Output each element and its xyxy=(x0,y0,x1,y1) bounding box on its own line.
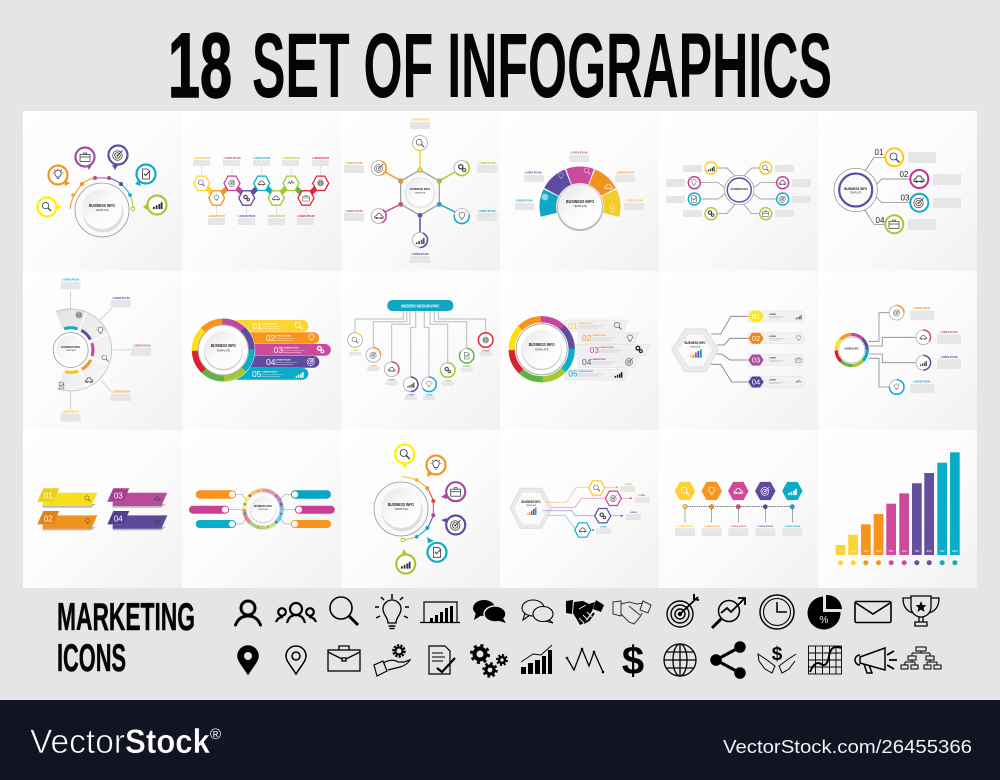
panel 16: hexagon hub with four lines: LOREM xyxy=(638,495,646,497)
panel 14: dotted ring with six pill bars: TEMPLATE xyxy=(258,508,269,511)
panel 12: ring with four connected nodes: LOREM IPSUM xyxy=(913,307,930,310)
panel 16: hexagon hub with four lines: LOREM xyxy=(630,512,637,514)
icon: growth bars xyxy=(521,645,552,674)
icon: trophy xyxy=(903,596,939,626)
icon row 2 xyxy=(238,639,941,683)
panel 8: colour ring with five numbered ribbons: LOREM IPSUM xyxy=(275,336,291,338)
panel 10: colour ring with five grey tabs: 03 xyxy=(590,345,599,355)
panel 6: ring with numbered options: 01 xyxy=(875,148,884,157)
panel 8: colour ring with five numbered ribbons: LOREM IPSUM xyxy=(262,324,277,326)
panel 10: colour ring with five grey tabs: 04 xyxy=(582,357,592,367)
panel 13: four parallelogram banners: 03 xyxy=(114,492,123,501)
panel 2: hexagon chain xyxy=(193,157,329,225)
panel 2: hexagon chain: LOREM IPSUM xyxy=(208,215,225,218)
panel 6: ring with numbered options: 03 xyxy=(901,194,910,202)
panel 18: percentage bar chart: 60% xyxy=(902,551,907,553)
panel 8: colour ring with five numbered ribbons: LOREM IPSUM xyxy=(262,372,277,374)
panel 2: hexagon chain: LOREM IPSUM xyxy=(298,215,314,218)
panel 2: hexagon chain: LOREM IPSUM xyxy=(283,157,299,160)
panel 7: half-ring fan with dashed callouts: LOREM IPSUM xyxy=(62,410,79,414)
icon: growth magnifier xyxy=(712,598,745,628)
panel 10: colour ring with five grey tabs: LOREM IPSUM xyxy=(599,347,614,349)
icon: outline speech bubbles xyxy=(522,600,553,623)
panel 4: segmented semi-donut xyxy=(515,152,644,231)
panel 7: half-ring fan with dashed callouts: LOREM IPSUM xyxy=(113,390,129,394)
panel 6: ring with numbered options: BUSINESS INFO xyxy=(844,186,867,191)
panel 4: segmented semi-donut: LOREM IPSUM xyxy=(516,200,532,202)
panel 16: hexagon hub with four lines: TEMPLATE xyxy=(526,504,537,507)
icon: gears xyxy=(472,646,507,676)
panel 18: percentage bar chart xyxy=(836,452,960,565)
panel 17: five-hexagon timeline: LOREM IPSUM xyxy=(758,526,773,528)
panel 18: percentage bar chart: 90% xyxy=(940,551,945,553)
panel 10: colour ring with five grey tabs: LOREM IPSUM xyxy=(578,371,593,373)
panel 18: percentage bar chart: 100% xyxy=(952,551,958,553)
panel 11: hexagon hub with four hex-numbered rows: 02 xyxy=(752,334,760,343)
panel 17: five-hexagon timeline: LOREM IPSUM xyxy=(731,526,746,528)
panel 6: ring with numbered options xyxy=(834,148,961,233)
panel 7: half-ring fan with dashed callouts: LOREM IPSUM xyxy=(113,297,129,300)
icon: laptop chart xyxy=(420,602,460,622)
icon: people xyxy=(276,603,316,623)
panel 16: hexagon hub with four lines: LOREM xyxy=(600,526,607,528)
panel 16: hexagon hub with four lines: LOREM xyxy=(625,484,632,486)
panel 9: modern infographic org tree: LOREM xyxy=(388,380,396,382)
panel 3: hexagon with six spokes: LOREM IPSUM xyxy=(479,210,495,213)
panel 16: hexagon hub with four lines xyxy=(510,481,649,537)
panel 17: five-hexagon timeline xyxy=(675,482,803,536)
panel 8: colour ring with five numbered ribbons: 03 xyxy=(274,345,283,355)
panel 9: modern infographic org tree: LOREM xyxy=(351,350,359,352)
panel 3: hexagon with six spokes: BUSINESS INFO xyxy=(410,187,431,191)
heading: marketing icons: MARKETING xyxy=(57,596,195,639)
logo: VectorStock: ® xyxy=(210,726,221,743)
panel 18: percentage bar chart: 50% xyxy=(889,551,894,553)
panel 1: arc of speech bubbles xyxy=(38,146,166,237)
panel 12: ring with four connected nodes: LOREM IPSUM xyxy=(913,381,930,384)
panel 10: colour ring with five grey tabs xyxy=(499,307,650,392)
panel 11: hexagon hub with four hex-numbered rows: LOREM xyxy=(769,336,776,338)
icon: org chart xyxy=(901,647,941,669)
panel 18: percentage bar chart: 20% xyxy=(851,551,856,553)
panel 11: hexagon hub with four hex-numbered rows: BUSINESS INFO xyxy=(684,341,706,345)
icon: person xyxy=(236,601,260,625)
panel 7: half-ring fan with dashed callouts: LOREM IPSUM xyxy=(62,278,79,282)
panel 1: arc of speech bubbles: TEMPLATE xyxy=(96,208,109,212)
panel 3: hexagon with six spokes xyxy=(344,118,497,263)
logo: VectorStock xyxy=(30,723,221,761)
panel 10: colour ring with five grey tabs: 05 xyxy=(568,368,578,378)
panel 6: ring with numbered options: TEMPLATE xyxy=(850,192,862,194)
icon: megaphone xyxy=(855,648,897,673)
panel 8: colour ring with five numbered ribbons: 01 xyxy=(252,321,262,331)
icon: envelope xyxy=(855,602,891,622)
panel 11: hexagon hub with four hex-numbered rows: 01 xyxy=(752,312,760,321)
title: 18 xyxy=(168,15,232,117)
panel grid backgrounds xyxy=(23,111,977,588)
panel 8: colour ring with five numbered ribbons: LOREM IPSUM xyxy=(283,348,299,350)
panel 14: dotted ring with six pill bars xyxy=(189,483,335,535)
panel 2: hexagon chain: LOREM IPSUM xyxy=(238,215,255,218)
panel 8: colour ring with five numbered ribbons: TEMPLATE xyxy=(217,348,230,352)
panel 11: hexagon hub with four hex-numbered rows: LOREM xyxy=(769,314,776,316)
panel 9: modern infographic org tree: LOREM xyxy=(425,394,433,396)
icon: share xyxy=(711,642,745,678)
panel 8: colour ring with five numbered ribbons: 05 xyxy=(252,369,262,379)
panel 11: hexagon hub with four hex-numbered rows: 03 xyxy=(752,356,760,365)
panel 12: ring with four connected nodes: LOREM IPSUM xyxy=(941,356,957,359)
panel 8: colour ring with five numbered ribbons: LOREM IPSUM xyxy=(275,360,291,362)
panel 10: colour ring with five grey tabs: TEMPLATE xyxy=(535,348,549,352)
icon: solid handshake xyxy=(566,600,604,625)
panel 13: four parallelogram banners xyxy=(37,488,167,530)
panel 10: colour ring with five grey tabs: LOREM IPSUM xyxy=(591,359,606,361)
panel 13: four parallelogram banners: 04 xyxy=(114,514,123,523)
panel 11: hexagon hub with four hex-numbered rows: TEMPLATE xyxy=(690,346,701,348)
icon: percent pie: % xyxy=(820,615,829,626)
panel 10: colour ring with five grey tabs: 02 xyxy=(582,333,592,343)
icon: zig-zag line xyxy=(566,648,604,673)
panel 15: big disc with speech-bubble arc xyxy=(374,444,465,574)
icon: clock xyxy=(760,595,794,629)
panel 1: arc of speech bubbles: BUSINESS INFO xyxy=(89,203,116,208)
footer image reference: VectorStock.com/26455366 xyxy=(723,736,972,757)
heading: marketing icons xyxy=(57,596,195,680)
panel 18: percentage bar chart: 80% xyxy=(927,551,932,553)
icon: document check xyxy=(429,646,455,674)
icon: dollar sign: $ xyxy=(622,639,644,683)
icon: solid pin xyxy=(238,646,258,674)
panel 5: central ring with eight branches xyxy=(666,162,811,220)
panel 10: colour ring with five grey tabs: BUSINESS INFO xyxy=(529,342,555,347)
icon: hands with dollar: $ xyxy=(772,644,783,665)
panel 13: four parallelogram banners: 01 xyxy=(44,492,53,501)
panel 18: percentage bar chart: 30% xyxy=(864,551,868,553)
panel 3: hexagon with six spokes: LOREM IPSUM xyxy=(412,118,428,122)
icon: briefcase xyxy=(328,646,360,671)
panel 7: half-ring fan with dashed callouts xyxy=(53,278,151,422)
panel 11: hexagon hub with four hex-numbered rows: LOREM xyxy=(769,358,776,360)
panel 10: colour ring with five grey tabs: LOREM IPSUM xyxy=(591,335,606,337)
panel 15: big disc with speech-bubble arc: BUSINESS INFO xyxy=(388,502,415,507)
panel 2: hexagon chain: LOREM IPSUM xyxy=(224,157,240,160)
panel 3: hexagon with six spokes: LOREM IPSUM xyxy=(479,162,495,165)
panel 16: hexagon hub with four lines: BUSINESS INFO xyxy=(522,500,541,504)
icon: solid speech bubbles xyxy=(473,600,506,623)
panel 11: hexagon hub with four hex-numbered rows: LOREM xyxy=(769,380,776,382)
logo: VectorStock: Stock xyxy=(125,723,210,761)
panel 9: modern infographic org tree xyxy=(348,300,493,400)
panel 9: modern infographic org tree: LOREM xyxy=(444,380,452,382)
icon: target with arrow xyxy=(667,594,699,627)
panel 10: colour ring with five grey tabs: 01 xyxy=(568,321,578,331)
heading: marketing icons: ICONS xyxy=(57,637,126,680)
panel 9: modern infographic org tree: LOREM xyxy=(482,350,490,352)
panel 3: hexagon with six spokes: TEMPLATE xyxy=(415,192,426,194)
panel 17: five-hexagon timeline: LOREM IPSUM xyxy=(677,526,693,528)
panel 3: hexagon with six spokes: LOREM IPSUM xyxy=(346,210,362,213)
icon: line chart grid xyxy=(808,646,842,674)
panel 7: half-ring fan with dashed callouts: TEMPLATE xyxy=(65,349,77,352)
panel 11: hexagon hub with four hex-numbered rows xyxy=(672,311,805,388)
panel 7: half-ring fan with dashed callouts: BUSINESS INFO xyxy=(61,345,81,349)
panel 4: segmented semi-donut: LOREM IPSUM xyxy=(525,172,541,174)
panel 18: percentage bar chart: 40% xyxy=(876,551,881,553)
panel 8: colour ring with five numbered ribbons: 02 xyxy=(266,333,276,343)
panel 2: hexagon chain: LOREM IPSUM xyxy=(268,215,285,218)
panel 5: central ring with eight branches: BUSINESS INFO xyxy=(731,187,748,191)
panel 18: percentage bar chart: 70% xyxy=(915,551,919,553)
panel 7: half-ring fan with dashed callouts: LOREM IPSUM xyxy=(133,344,150,348)
panel 4: segmented semi-donut: TEMPLATE xyxy=(573,204,587,208)
panel 17: five-hexagon timeline: LOREM IPSUM xyxy=(785,526,800,528)
panel 4: segmented semi-donut: BUSINESS INFO xyxy=(566,199,595,204)
panel 17: five-hexagon timeline: LOREM IPSUM xyxy=(704,526,720,528)
icon: outline pin xyxy=(286,646,306,674)
icon: hand with gear xyxy=(374,646,410,676)
panel 3: hexagon with six spokes: LOREM IPSUM xyxy=(412,253,428,256)
panel 9: modern infographic org tree: LOREM xyxy=(407,394,415,396)
panel 3: hexagon with six spokes: LOREM IPSUM xyxy=(346,162,362,165)
panel 13: four parallelogram banners: 02 xyxy=(44,514,53,523)
panel 6: ring with numbered options: 04 xyxy=(876,216,885,225)
panel 8: colour ring with five numbered ribbons: 04 xyxy=(266,357,276,367)
logo: VectorStock: Vector xyxy=(30,723,125,761)
footer bar xyxy=(0,700,1000,780)
icon: globe xyxy=(664,644,696,676)
panel 9: modern infographic org tree: MODERN INFOGRAPHIC xyxy=(401,303,439,308)
title xyxy=(168,15,832,117)
icon: light bulb xyxy=(375,594,409,628)
panel 10: colour ring with five grey tabs: LOREM IPSUM xyxy=(578,323,593,325)
panel 15: big disc with speech-bubble arc: TEMPLATE xyxy=(394,507,408,511)
icon row 1 xyxy=(236,594,939,629)
panel 11: hexagon hub with four hex-numbered rows: 04 xyxy=(752,378,760,387)
panel 9: modern infographic org tree: LOREM xyxy=(370,365,377,367)
panel 18: percentage bar chart: 10% xyxy=(838,551,843,553)
panel 8: colour ring with five numbered ribbons: BUSINESS INFO xyxy=(211,343,236,348)
panel 2: hexagon chain: LOREM IPSUM xyxy=(253,157,270,160)
panel 12: ring with four connected nodes: LOREM IPSUM xyxy=(941,331,957,334)
panel 12: ring with four connected nodes: BUSINESS INFO xyxy=(845,346,859,350)
panel 6: ring with numbered options: 02 xyxy=(900,170,909,179)
icon: magnifier xyxy=(330,597,358,625)
panel 14: dotted ring with six pill bars: BUSINESS INFO xyxy=(254,504,273,508)
panel 9: modern infographic org tree: LOREM xyxy=(463,366,471,368)
icon: outline handshake xyxy=(613,601,651,624)
panel 2: hexagon chain: LOREM IPSUM xyxy=(312,157,329,160)
panel 8: colour ring with five numbered ribbons xyxy=(183,310,331,390)
icon: percent pie xyxy=(808,595,842,629)
panel 4: segmented semi-donut: LOREM IPSUM xyxy=(626,200,642,202)
panel 4: segmented semi-donut: LOREM IPSUM xyxy=(617,172,633,174)
icon: hands with dollar xyxy=(758,644,796,673)
panel 2: hexagon chain: LOREM IPSUM xyxy=(193,157,210,160)
panel 4: segmented semi-donut: LOREM IPSUM xyxy=(571,152,587,154)
panel 12: ring with four connected nodes xyxy=(830,305,961,394)
